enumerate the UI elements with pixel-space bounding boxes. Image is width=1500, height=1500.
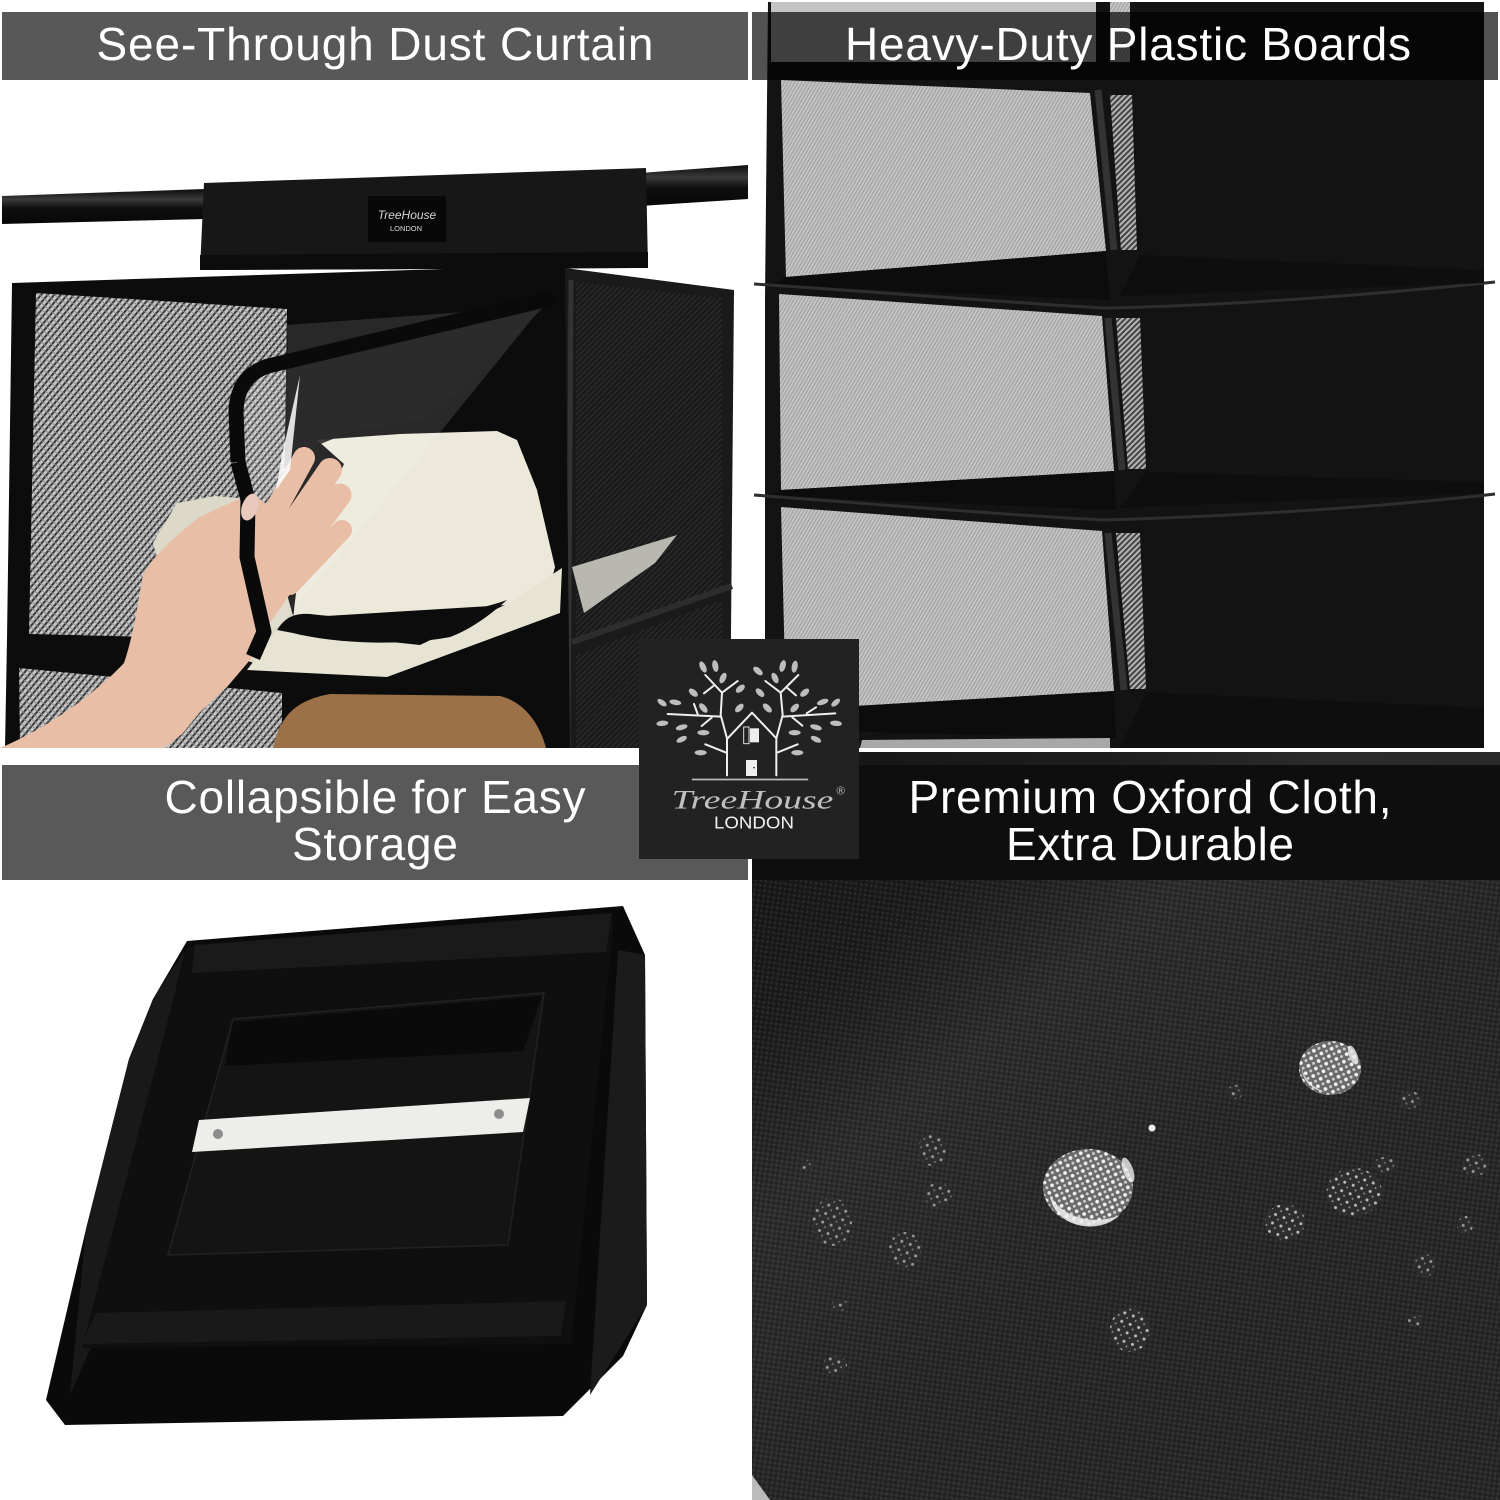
icon: tree leaves — [656, 659, 842, 755]
photo: rail sleeve with sewn label: TreeHouse — [378, 208, 437, 222]
heading band: premium oxford cloth: Premium Oxford Cloth, — [908, 771, 1392, 823]
photo: top velcro strip — [192, 913, 612, 973]
photo: white strap with rivets — [192, 1098, 530, 1152]
photo: mesh back panel — [29, 293, 287, 640]
photo: rail sleeve with sewn label: LONDON — [390, 224, 422, 233]
photo: shelf one mesh — [770, 80, 1137, 300]
photo: organiser side panel — [562, 268, 734, 748]
heading band: collapsible for easy storage: Storage — [292, 818, 458, 870]
photo: small water droplets — [801, 1085, 1488, 1374]
icon: house window and door — [744, 727, 759, 776]
photo: folded organiser — [46, 906, 647, 1425]
heading band: see-through dust curtain: See-Through Dust Curtain — [96, 18, 654, 70]
photo: brown hat — [273, 694, 546, 748]
photo: large water droplets — [1043, 1041, 1382, 1352]
photo: top compartment mesh — [771, 2, 1130, 62]
photo: lower shelf mesh — [19, 668, 282, 748]
photo: rail sleeve with sewn label — [200, 168, 648, 270]
photo: mesh sides — [70, 950, 647, 1395]
logo wordmark: ® — [836, 785, 845, 797]
logo wordmark: LONDON — [714, 812, 794, 832]
panel: premium oxford cloth — [752, 752, 1500, 1500]
heading band: premium oxford cloth — [752, 765, 1500, 880]
photo: fold flap — [168, 993, 544, 1255]
ground line — [692, 779, 808, 780]
panel: heavy-duty plastic boards — [754, 2, 1495, 748]
heading band: collapsible for easy storage: Collapsible for Easy — [164, 771, 586, 823]
photo: cream straw hat — [153, 431, 677, 677]
photo: shelf two mesh — [770, 294, 1146, 510]
photo: organiser front frame — [5, 265, 570, 748]
photo: hanging rail — [2, 165, 748, 224]
photo: finger nail and curtain edge — [238, 462, 264, 657]
droplet highlights — [1050, 1044, 1360, 1227]
icon: tree house branches — [668, 675, 835, 775]
photo: black cloth background — [752, 752, 1500, 1500]
photo: shelf boards and zips — [754, 90, 1495, 690]
photo: hand holding curtain — [0, 375, 342, 748]
heading band: see-through dust curtain — [2, 12, 748, 80]
panel: see-through dust curtain — [0, 165, 748, 748]
photo: organiser body — [765, 2, 1484, 748]
heading band: premium oxford cloth: Extra Durable — [1006, 818, 1294, 870]
photo: shelf three mesh — [780, 507, 1146, 748]
photo: clear curtain — [234, 298, 553, 650]
logo: TreeHouse London — [639, 639, 859, 859]
logo wordmark — [672, 785, 845, 832]
panel: collapsible for easy storage — [46, 906, 647, 1425]
photo: main cloth panel — [82, 920, 614, 1348]
heading band: heavy-duty plastic boards — [752, 12, 1498, 80]
photo: lower velcro strip — [82, 1301, 566, 1344]
heading band: collapsible for easy storage — [2, 765, 748, 880]
photo: velcro strip — [225, 996, 542, 1066]
photo: shelf shadow on right side — [1120, 255, 1484, 748]
logo wordmark: TreeHouse — [672, 785, 834, 815]
heading band: heavy-duty plastic boards: Heavy-Duty Plastic Boards — [845, 18, 1411, 70]
